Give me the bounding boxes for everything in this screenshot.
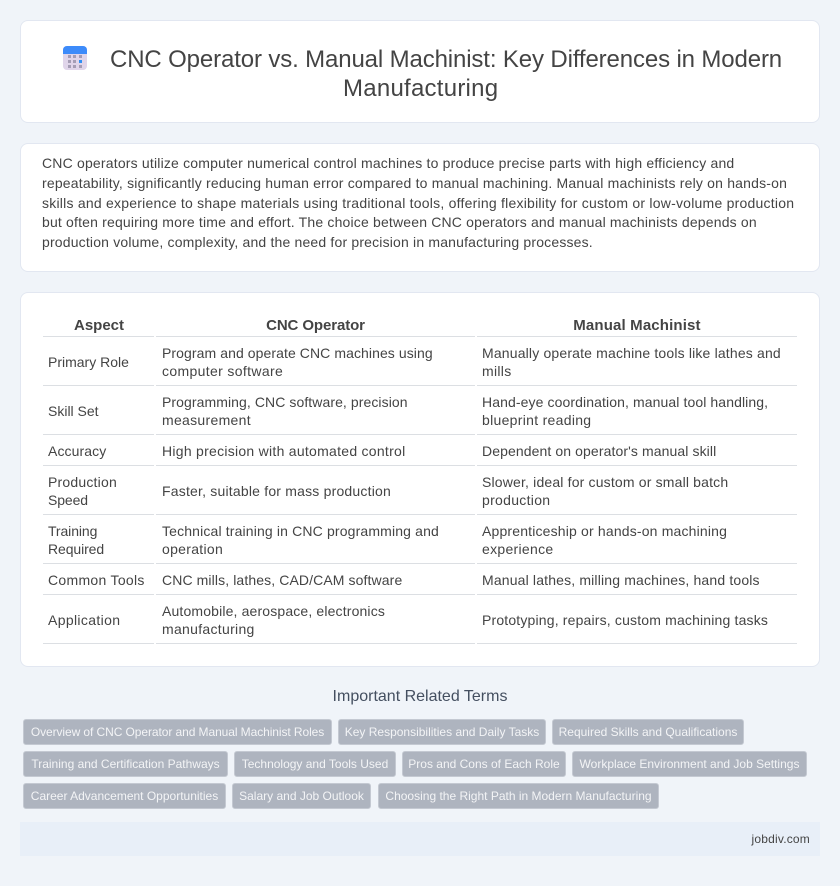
- tag: [23, 719, 332, 745]
- table: High precision with automated control: [162, 443, 405, 459]
- tag: [23, 783, 226, 809]
- row: Common Tools: Common Tools: [48, 572, 145, 588]
- header card: [20, 20, 820, 123]
- tag: Pros and Cons of Each Role: [408, 757, 560, 771]
- table: Apprenticeship or hands-on machining: [482, 523, 727, 539]
- title: Manufacturing: [343, 75, 498, 102]
- tag: [552, 719, 744, 745]
- tag: Choosing the Right Path in Modern Manufacturing: [385, 789, 652, 803]
- table: CNC mills, lathes, CAD/CAM software: [162, 572, 402, 588]
- tag: [572, 751, 807, 777]
- table: Faster, suitable for mass production: [162, 483, 391, 499]
- table: blueprint reading: [482, 412, 591, 428]
- table: measurement: [162, 412, 251, 428]
- header: Aspect: Aspect: [74, 317, 124, 334]
- intro paragraph: [42, 155, 794, 250]
- table: production: [482, 492, 550, 508]
- tag: Key Responsibilities and Daily Tasks: [345, 725, 539, 739]
- table: computer software: [162, 363, 283, 379]
- title: CNC Operator vs. Manual Machinist: Key Differences in Modern: [110, 46, 782, 73]
- intro paragraph: production volume, complexity, and the need for precision in manufacturing processes.: [42, 234, 593, 250]
- tag: Overview of CNC Operator and Manual Machinist Roles: [31, 725, 324, 739]
- footer source: jobdiv.com: [752, 832, 810, 846]
- table: Required: [48, 541, 104, 557]
- tag: Required Skills and Qualifications: [559, 725, 737, 739]
- table: Programming, CNC software, precision: [162, 394, 408, 410]
- table: Automobile, aerospace, electronics: [162, 603, 385, 619]
- header: Manual Machinist: Manual Machinist: [573, 317, 701, 334]
- footer bar: [20, 822, 820, 856]
- icon: calendar: [63, 46, 87, 70]
- row: Production Speed: Production: [48, 474, 117, 490]
- row: Accuracy: Accuracy: [48, 443, 106, 459]
- tag: Training and Certification Pathways: [31, 757, 220, 771]
- tag: Workplace Environment and Job Settings: [580, 757, 799, 771]
- header: CNC Operator: CNC Operator: [266, 317, 365, 334]
- row: Primary Role: Primary Role: [48, 354, 129, 370]
- tag: [234, 751, 396, 777]
- table: Prototyping, repairs, custom machining tasks: [482, 612, 768, 628]
- table: manufacturing: [162, 621, 255, 637]
- title: [110, 46, 782, 102]
- table: [43, 317, 797, 644]
- table: mills: [482, 363, 512, 379]
- tag: Career Advancement Opportunities: [31, 789, 218, 803]
- table: Manually operate machine tools like lathes and: [482, 345, 781, 361]
- related terms heading: Important Related Terms: [333, 688, 507, 705]
- comparison table card: [20, 292, 820, 667]
- tag: [232, 783, 371, 809]
- table: Hand-eye coordination, manual tool handling,: [482, 394, 768, 410]
- tag: Salary and Job Outlook: [239, 789, 364, 803]
- table: Slower, ideal for custom or small batch: [482, 474, 728, 490]
- table: experience: [482, 541, 554, 557]
- tag: Technology and Tools Used: [242, 757, 388, 771]
- intro paragraph: CNC operators utilize computer numerical control machines to produce precise parts with high efficiency and: [42, 155, 734, 171]
- table: Manual lathes, milling machines, hand tools: [482, 572, 760, 588]
- table: Dependent on operator's manual skill: [482, 443, 716, 459]
- tag: [338, 719, 546, 745]
- table: operation: [162, 541, 223, 557]
- intro paragraph: but often requiring more time and effort. The choice between CNC operators and manual machinists depends on: [42, 214, 757, 230]
- row: Application: Application: [48, 612, 120, 628]
- row: Skill Set: Skill Set: [48, 403, 99, 419]
- intro paragraph: repeatability, significantly reducing human error compared to manual machining. Manual machinists rely on hands-on: [42, 175, 787, 191]
- related term tags: [23, 719, 807, 809]
- tag: [378, 783, 659, 809]
- row: Training Required: Training: [48, 523, 97, 539]
- intro text card: [20, 143, 820, 272]
- table: Program and operate CNC machines using: [162, 345, 433, 361]
- tag: [23, 751, 228, 777]
- table: Speed: [48, 492, 88, 508]
- intro paragraph: skills and experience to shape materials using traditional tools, offering flexibility for custom or low-volume production: [42, 195, 794, 211]
- table: Technical training in CNC programming and: [162, 523, 439, 539]
- tag: [402, 751, 566, 777]
